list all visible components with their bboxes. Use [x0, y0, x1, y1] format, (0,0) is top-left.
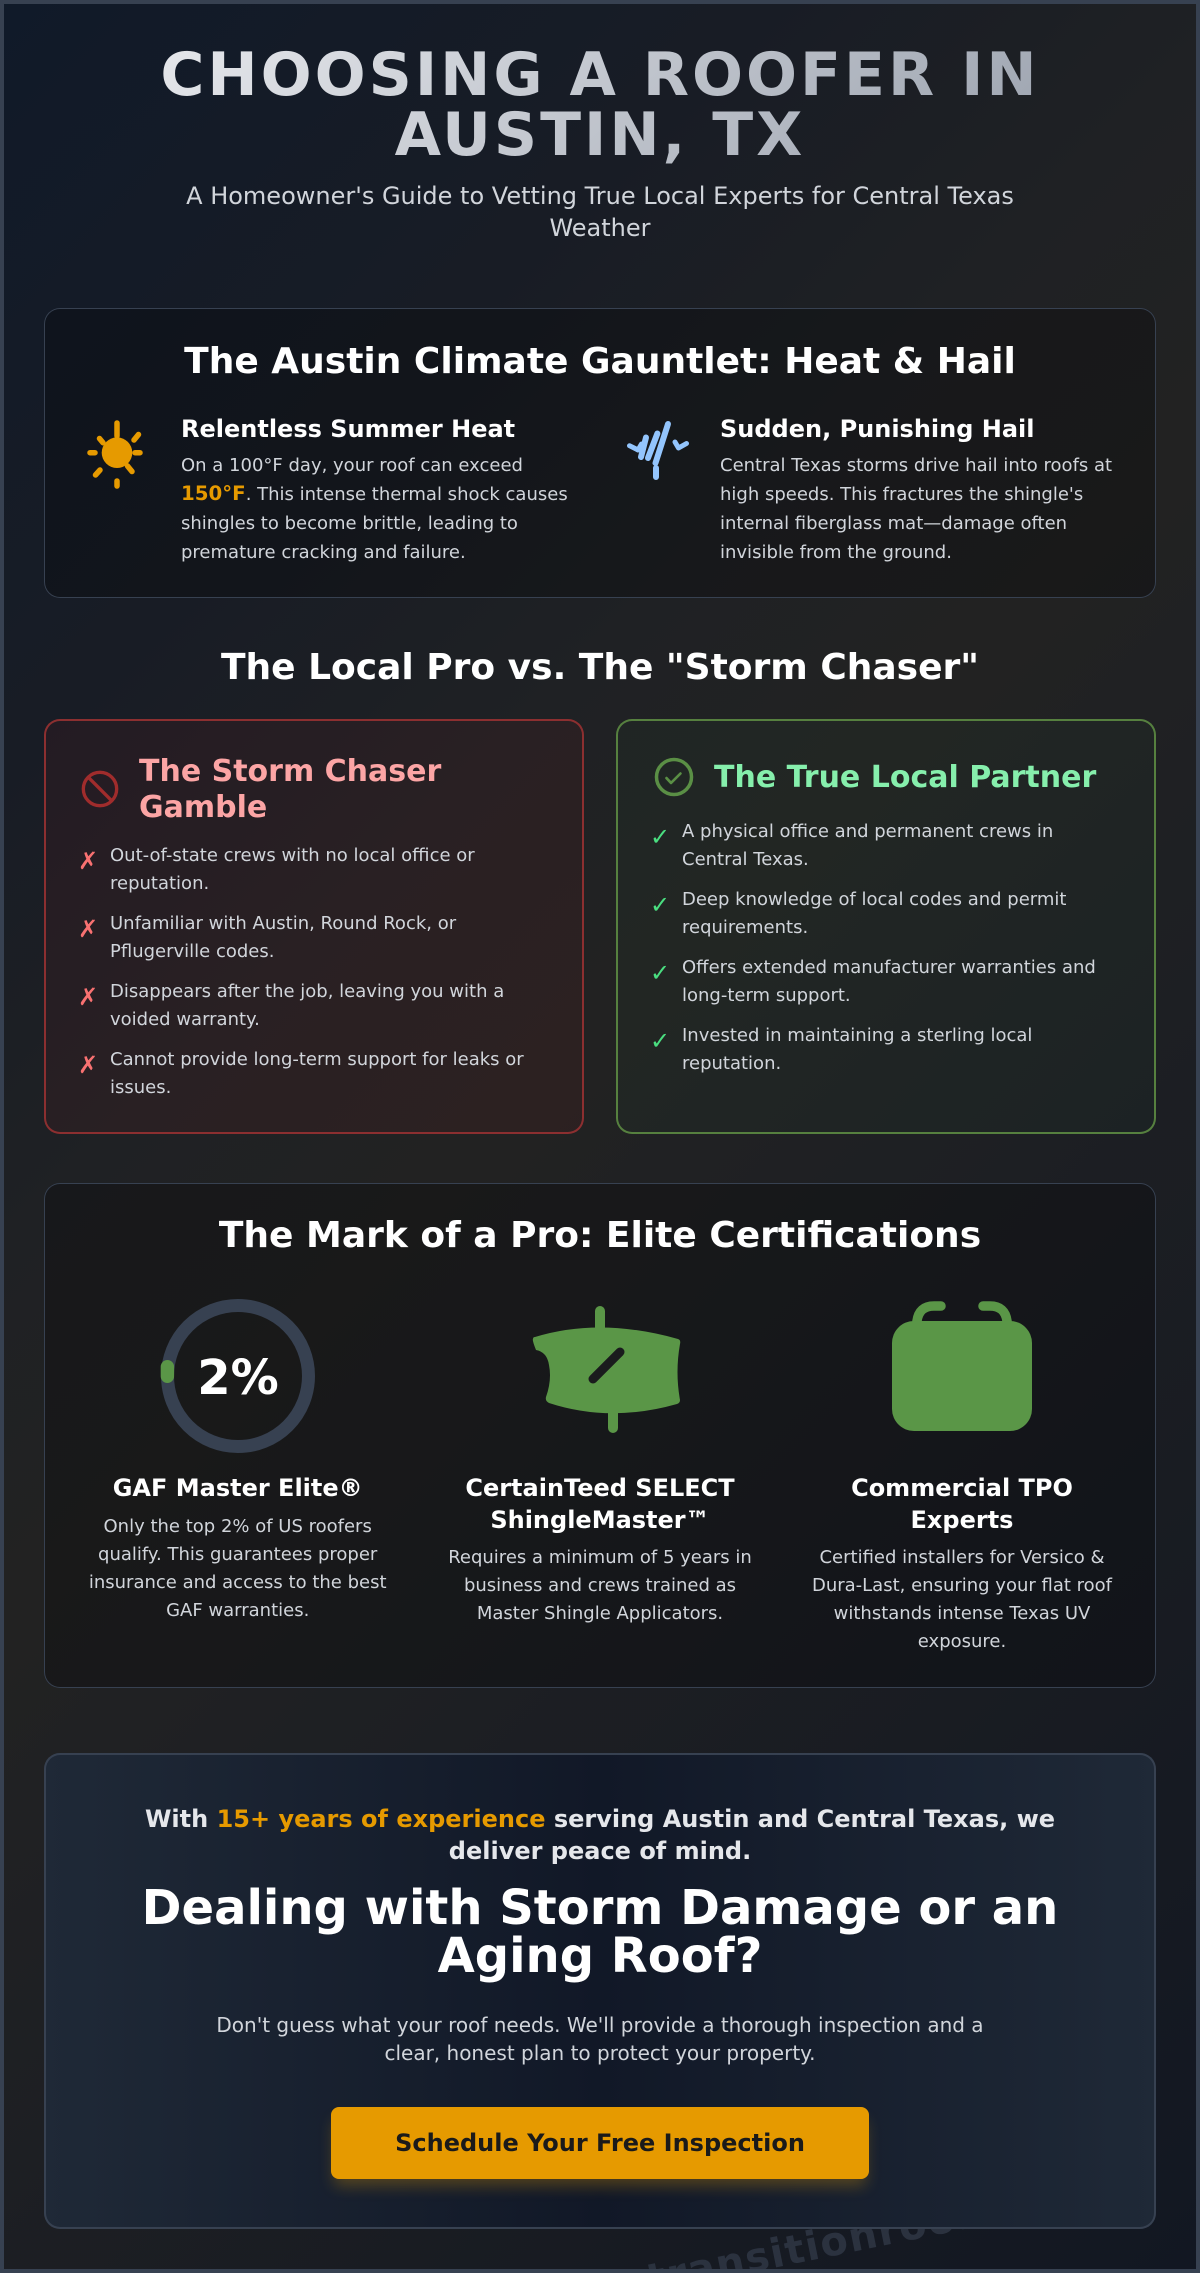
text: TPO description: Dura-Last, ensuring your flat roof: [812, 1575, 1112, 1596]
list: storm chaser risks: voided warranty.: [110, 1009, 260, 1030]
icon: 2 percent ring: [160, 1299, 315, 1453]
panel: certifications: [44, 1183, 1156, 1688]
list: local partner benefits: [650, 821, 1096, 1074]
text: hail description: high speeds. This fractures the shingle's: [720, 484, 1083, 505]
certification: Commercial TPO: [812, 1301, 1112, 1652]
heading: call to action: [142, 1880, 1058, 1984]
list: storm chaser risks: Pflugerville codes.: [110, 941, 274, 962]
list: local partner benefits: A physical office and permanent crews in: [682, 821, 1053, 842]
icon: shingle badge: [532, 1306, 680, 1433]
climate item: summer heat: [87, 415, 568, 563]
subheading: GAF: GAF Master Elite®: [113, 1474, 363, 1502]
list: storm chaser risks: [78, 845, 524, 1098]
heading: storm chaser: Gamble: [139, 790, 267, 825]
list: storm chaser risks: Disappears after the job, leaving you with a: [110, 981, 504, 1002]
list: local partner benefits: ✓: [650, 823, 670, 851]
panel: climate gauntlet: [44, 308, 1156, 598]
list: local partner benefits: requirements.: [682, 917, 808, 938]
icon: 2 percent ring: 2%: [197, 1350, 279, 1406]
heading: true local partner: The True Local Partner: [714, 760, 1096, 795]
list: local partner benefits: ✓: [650, 1027, 670, 1055]
text: experience statement: [145, 1805, 1055, 1865]
text: GAF description: [89, 1516, 387, 1621]
icon: check circle: [654, 758, 694, 796]
subtitle: Weather: [549, 214, 651, 242]
subheading: heat: Relentless Summer Heat: [181, 415, 515, 443]
text: TPO description: Certified installers for Versico &: [819, 1547, 1105, 1568]
heading: local pro vs storm chaser: The Local Pro vs. The "Storm Chaser": [221, 646, 979, 688]
subheading: Commercial TPO: Experts: [911, 1506, 1013, 1534]
list: storm chaser risks: ✗: [78, 915, 98, 943]
title: CHOOSING A ROOFER IN: [160, 40, 1040, 110]
subtitle: A Homeowner's Guide to Vetting True Local Experts for Central Texas: [186, 182, 1014, 210]
heading: storm chaser: [139, 754, 442, 825]
text: CertainTeed description: Requires a minimum of 5 years in: [448, 1547, 752, 1568]
heading: certifications: The Mark of a Pro: Elite Certifications: [219, 1215, 981, 1256]
text: hail description: internal fiberglass mat—damage often: [720, 513, 1067, 534]
icon: sun: [87, 420, 143, 489]
list: storm chaser risks: Unfamiliar with Austin, Round Rock, or: [110, 913, 456, 934]
text: heat description: [181, 455, 568, 563]
text: heat description: On a 100°F day, your roof can exceed: [181, 455, 523, 476]
text: hail description: Central Texas storms drive hail into roofs at: [720, 455, 1112, 476]
panel: storm chaser gamble: [44, 719, 584, 1134]
panel: true local partner: [616, 719, 1156, 1134]
title: AUSTIN, TX: [395, 100, 805, 170]
climate item: hail: [627, 415, 1112, 563]
subheading: CertainTeed: CertainTeed SELECT: [465, 1474, 735, 1502]
text: call to action description: Don't guess what your roof needs. We'll provide a thorough inspection and a: [216, 2013, 984, 2037]
heading: storm chaser: The Storm Chaser: [139, 754, 441, 789]
list: local partner benefits: Central Texas.: [682, 849, 809, 870]
text: experience statement: deliver peace of mind.: [449, 1837, 751, 1865]
icon: prohibited: [82, 770, 118, 808]
list: storm chaser risks: issues.: [110, 1077, 171, 1098]
certification: GAF: [89, 1299, 387, 1621]
title: [160, 45, 1040, 165]
list: storm chaser risks: ✗: [78, 847, 98, 875]
subheading: Commercial TPO: Commercial TPO: [851, 1474, 1073, 1502]
list: local partner benefits: Invested in maintaining a sterling local: [682, 1025, 1032, 1046]
text: heat description: shingles to become brittle, leading to: [181, 513, 518, 534]
text: CertainTeed description: business and crews trained as: [464, 1575, 736, 1596]
text: call to action description: [216, 2013, 984, 2065]
text: call to action description: clear, honest plan to protect your property.: [384, 2041, 816, 2065]
text: TPO description: exposure.: [918, 1631, 1006, 1652]
panel: call to action: [44, 1753, 1156, 2229]
subheading: CertainTeed: ShingleMaster™: [490, 1506, 710, 1534]
list: storm chaser risks: reputation.: [110, 873, 209, 894]
text: GAF description: insurance and access to the best: [89, 1572, 387, 1593]
text: hail description: invisible from the ground.: [720, 542, 952, 563]
list: storm chaser risks: Out-of-state crews with no local office or: [110, 845, 475, 866]
icon: hail: [627, 421, 689, 480]
text: TPO description: [812, 1547, 1112, 1652]
list: local partner benefits: Deep knowledge of local codes and permit: [682, 889, 1066, 910]
text: GAF description: GAF warranties.: [166, 1600, 309, 1621]
button: schedule inspection: Schedule Your Free Inspection: [395, 2129, 805, 2157]
list: storm chaser risks: ✗: [78, 1051, 98, 1079]
icon: commercial case: [892, 1301, 1032, 1431]
text: heat description: 150°F. This intense thermal shock causes: [181, 482, 568, 505]
list: storm chaser risks: ✗: [78, 983, 98, 1011]
text: GAF description: Only the top 2% of US roofers: [104, 1516, 372, 1537]
heading: climate: The Austin Climate Gauntlet: Heat & Hail: [184, 340, 1016, 382]
list: local partner benefits: Offers extended manufacturer warranties and: [682, 957, 1096, 978]
list: local partner benefits: reputation.: [682, 1053, 781, 1074]
subheading: Commercial TPO: [851, 1474, 1073, 1534]
list: local partner benefits: long-term support.: [682, 985, 851, 1006]
text: hail description: [720, 455, 1112, 563]
text: experience statement: With 15+ years of experience serving Austin and Central Texas, we: [145, 1805, 1055, 1833]
button: schedule inspection: [331, 2107, 869, 2179]
list: storm chaser risks: Cannot provide long-term support for leaks or: [110, 1049, 524, 1070]
certification: CertainTeed: [448, 1306, 752, 1624]
subtitle: [186, 182, 1014, 242]
list: local partner benefits: ✓: [650, 891, 670, 919]
list: local partner benefits: ✓: [650, 959, 670, 987]
subheading: CertainTeed: [465, 1474, 735, 1534]
heading: call to action: Dealing with Storm Damage or an: [142, 1880, 1058, 1936]
text: TPO description: withstands intense Texas UV: [834, 1603, 1090, 1624]
text: CertainTeed description: [448, 1547, 752, 1624]
text: CertainTeed description: Master Shingle Applicators.: [477, 1603, 723, 1624]
subheading: hail: Sudden, Punishing Hail: [720, 415, 1035, 443]
text: GAF description: qualify. This guarantees proper: [98, 1544, 377, 1565]
heading: call to action: Aging Roof?: [438, 1928, 762, 1984]
text: heat description: premature cracking and failure.: [181, 542, 466, 563]
